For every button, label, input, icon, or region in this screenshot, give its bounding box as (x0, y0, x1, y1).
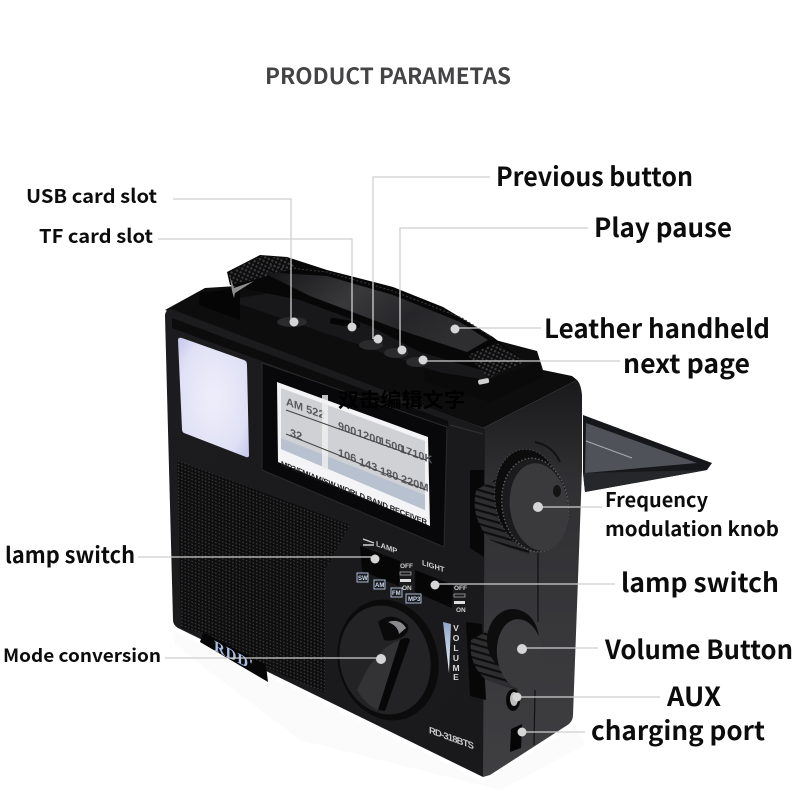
label: left lamp switch: lamp switch (5, 538, 135, 570)
RDD badge (200, 632, 268, 682)
leader: volume button (517, 644, 598, 654)
strap texture (468, 343, 525, 378)
label: Volume Button: Volume Button (604, 630, 793, 667)
volume text: V (453, 623, 459, 633)
light switch (415, 570, 453, 608)
label: Mode conversion: Mode conversion (3, 642, 161, 668)
label: AUX: AUX (666, 677, 721, 714)
leader: TF card slot (158, 239, 356, 332)
mode selector labels (357, 573, 421, 603)
mode selector labels: MP3 (408, 597, 421, 603)
label: Frequency modulation knob (605, 484, 779, 542)
top gloss (228, 288, 500, 386)
leader: previous button (373, 177, 490, 344)
side panel (483, 380, 582, 777)
tuning dial (277, 382, 433, 527)
solar panel (583, 415, 712, 492)
tuning dial: 220M (401, 473, 428, 495)
mode selector dial (325, 589, 451, 731)
lamp off on marks: OFF (400, 563, 413, 570)
tuning dial: MP3/FM/AM/SW WORLD BAND RECEIVER (281, 459, 427, 527)
top buttons (277, 317, 428, 367)
radio product photo (165, 255, 712, 790)
usb charging port (510, 724, 522, 752)
model number: RD-318BTS (429, 725, 474, 752)
label: TF card slot: TF card slot (39, 222, 153, 249)
mode selector labels: SW (358, 576, 368, 582)
volume text: E (453, 672, 459, 682)
handle left mount (199, 288, 240, 320)
lamp switch (360, 546, 400, 586)
lamp off on marks (400, 563, 413, 592)
tuning dial: 900 (338, 420, 356, 439)
leader: frequency knob (533, 502, 602, 512)
leader: leather handheld (450, 324, 541, 334)
tuning dial: 32 (290, 427, 302, 443)
volume knob (466, 609, 547, 700)
label: right lamp switch: lamp switch (621, 563, 779, 600)
lamp switch label (363, 539, 397, 556)
label: Frequency modulation knob: modulation knob (605, 513, 779, 542)
tuning dial: 1710K (400, 443, 433, 467)
light off on marks: OFF (454, 585, 467, 592)
leader: left lamp switch (138, 554, 380, 564)
front top ridge (172, 318, 448, 430)
leader: next page (418, 356, 620, 364)
leader: USB card slot (173, 199, 298, 326)
tuning dial: 180 (380, 465, 398, 484)
label: USB card slot: USB card slot (26, 182, 157, 209)
leather stitching (270, 266, 492, 337)
mode selector labels: AM (375, 583, 384, 589)
volume text (452, 623, 460, 682)
title: PRODUCT PARAMETAS (265, 59, 511, 91)
tuning dial: 1500 (379, 435, 403, 456)
handle strap (227, 255, 520, 372)
leather panel (262, 272, 488, 352)
side panel seam (534, 552, 538, 745)
label: next page: next page (623, 344, 750, 381)
volume text: L (453, 643, 459, 653)
handle right mount (424, 362, 543, 402)
handle metal pin (478, 378, 489, 385)
frequency knob (470, 445, 574, 557)
label: Play pause: Play pause (594, 208, 732, 245)
lamp switch label: LAMP (376, 539, 397, 556)
leader: AUX (512, 692, 660, 702)
tuning dial: 143 (359, 456, 377, 475)
light switch label: LIGHT (422, 558, 445, 574)
metal clip (230, 277, 254, 298)
RDD badge: RDD' (214, 638, 254, 675)
front face (165, 309, 485, 777)
aux jack (506, 689, 520, 711)
work lamp (178, 338, 249, 457)
light off on marks (454, 585, 467, 614)
volume text: O (453, 633, 460, 643)
leader: mode conversion (165, 654, 386, 664)
tuning dial: 106 (338, 447, 356, 466)
editor placeholder text: 双击编辑文字 (338, 384, 465, 413)
volume text: M (452, 663, 460, 673)
tuning dial: 1200 (357, 427, 381, 448)
label: Previous button: Previous button (496, 157, 693, 194)
label: Leather handheld: Leather handheld (544, 309, 770, 346)
tuning dial: AM 522 (286, 396, 324, 422)
volume text: U (453, 653, 459, 663)
speaker grille (177, 460, 350, 693)
leader: charging port (518, 728, 585, 736)
right front strip (450, 425, 483, 434)
top face (165, 282, 577, 428)
leader: right lamp switch (430, 580, 615, 590)
tuning display frame (262, 363, 447, 547)
lamp off on marks: ON (402, 585, 412, 592)
label: charging port: charging port (591, 711, 765, 748)
leader: play pause (398, 228, 588, 354)
ground shadow (173, 630, 585, 790)
label: Frequency modulation knob: Frequency (605, 484, 709, 513)
volume wedge (443, 622, 451, 673)
light off on marks: ON (456, 607, 466, 614)
left strap texture (228, 256, 296, 284)
knob well arc (535, 442, 560, 462)
mode selector labels: FM (392, 591, 401, 597)
